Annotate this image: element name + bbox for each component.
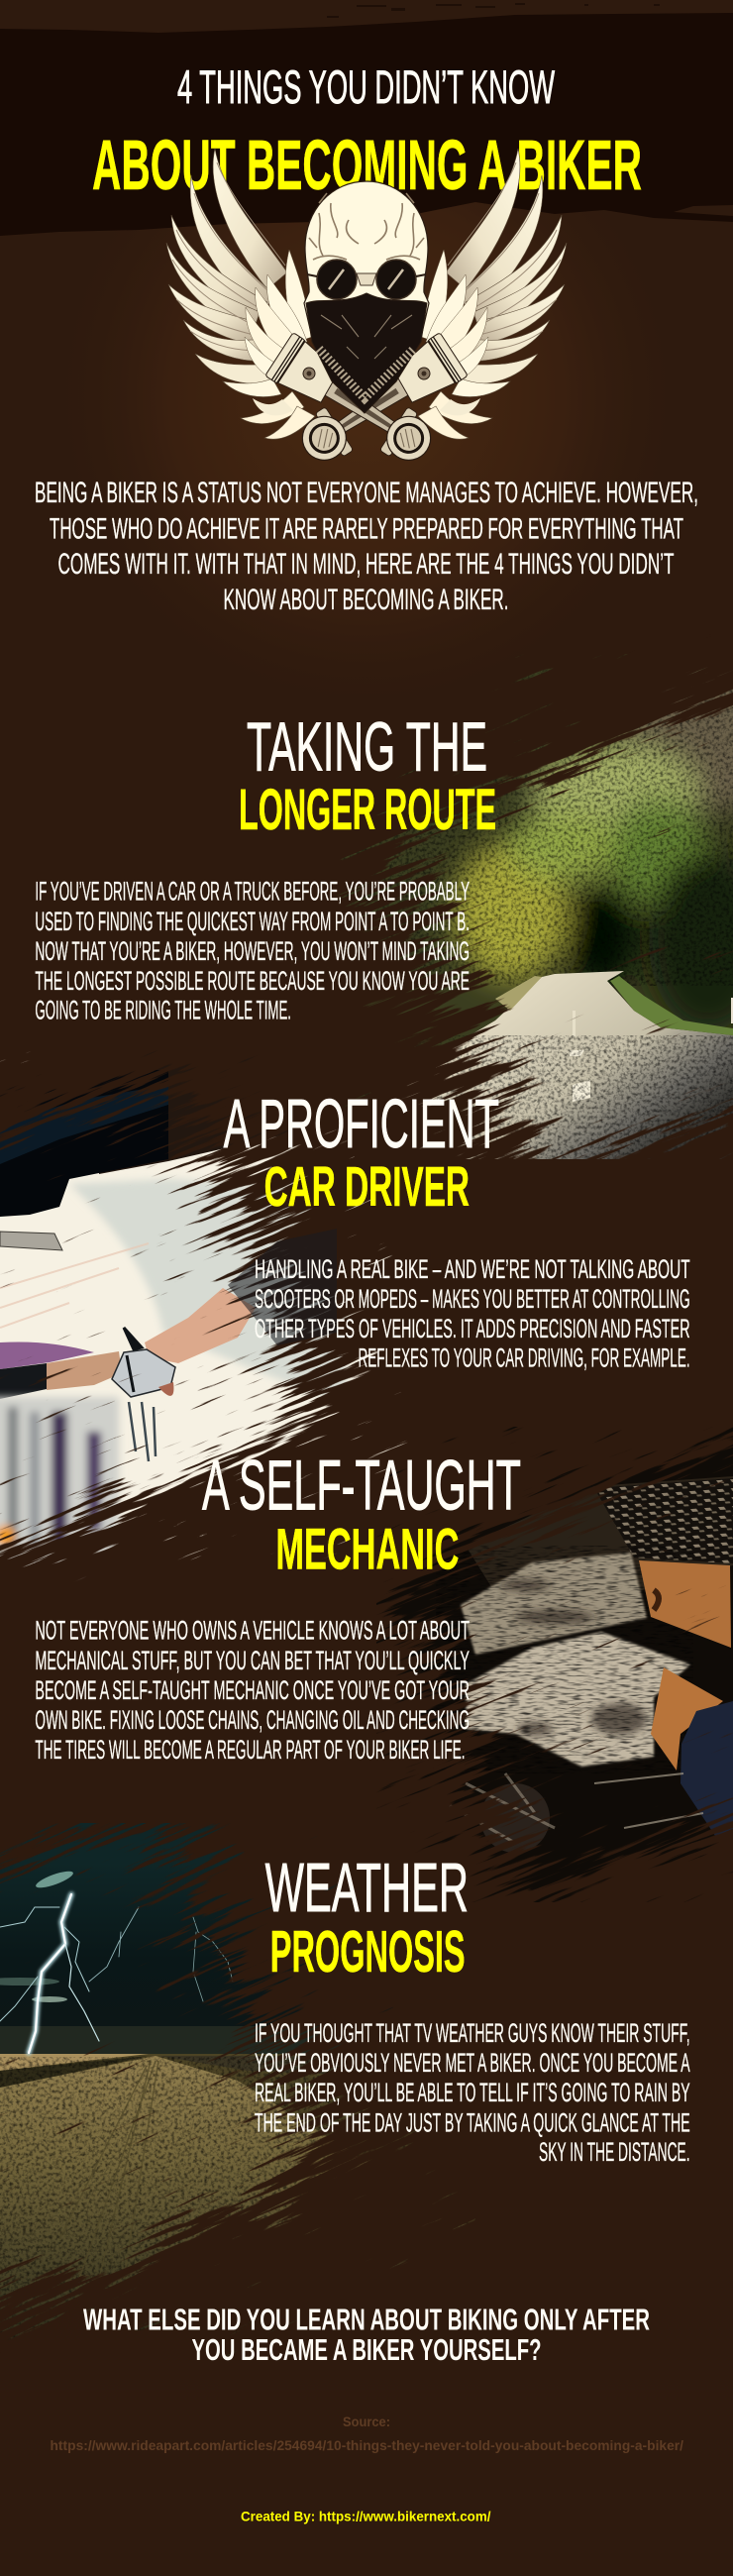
section 2 subheading: CAR DRIVER [264,1155,470,1219]
photo: hands on motorcycle handlebar [0,1050,416,1575]
section 1 subheading: LONGER ROUTE [239,778,496,842]
right wing [418,149,567,439]
section 3 heading: A SELF-TAUGHT [202,1447,521,1525]
section 2 text [255,1254,690,1373]
section 1 text: GOING TO BE RIDING THE WHOLE TIME. [35,996,291,1025]
glow behind emblem [0,99,733,694]
right piston [292,333,468,472]
section 4 heading: WEATHER [265,1849,469,1926]
section 1: Taking the longer route [35,707,496,1025]
skull [304,181,429,342]
skull emblem with wings and pistons [166,149,567,472]
section 2 heading: A PROFICIENT [224,1085,499,1162]
photo: lightning storm over dirt road [0,1823,475,2358]
section 4 subheading: PROGNOSIS [270,1919,466,1985]
bandana [306,293,427,413]
left piston [265,333,441,472]
section 3 text [35,1616,470,1765]
intro paragraph [35,477,698,616]
source credit [50,2414,683,2453]
section 1 heading: TAKING THE [247,707,487,785]
closing question [83,2303,650,2367]
skull shading [309,193,424,260]
bandana folds and border [321,315,412,359]
intro paragraph: KNOW ABOUT BECOMING A BIKER. [224,584,509,616]
closing question: YOU BECAME A BIKER YOURSELF? [192,2332,541,2367]
sunglasses [307,260,426,299]
section 3 subheading: MECHANIC [275,1518,459,1581]
source credit: https://www.rideapart.com/articles/254694/10-things-they-never-told-you-about-becoming-a-biker/ [50,2437,683,2453]
left wing [166,149,315,439]
section 4: Weather prognosis [255,1849,690,2167]
created by credit: Created By: https://www.bikernext.com/ [241,2510,491,2524]
dark header brush band [0,13,733,236]
lightning bolts [0,1894,233,2053]
section 2: A proficient car driver [224,1085,690,1373]
jacket patch behind text [228,1229,337,1345]
photo: gloved hands on engine [376,1427,733,1902]
photo: forest road [327,654,733,1159]
section 1 text [35,877,470,1025]
top brush texture strip [327,3,660,18]
section 3: A self-taught mechanic [35,1447,521,1765]
glove shadows [500,1579,647,1736]
header title [92,61,642,205]
source credit: Source: [343,2414,390,2429]
section 4 text [255,2018,690,2167]
